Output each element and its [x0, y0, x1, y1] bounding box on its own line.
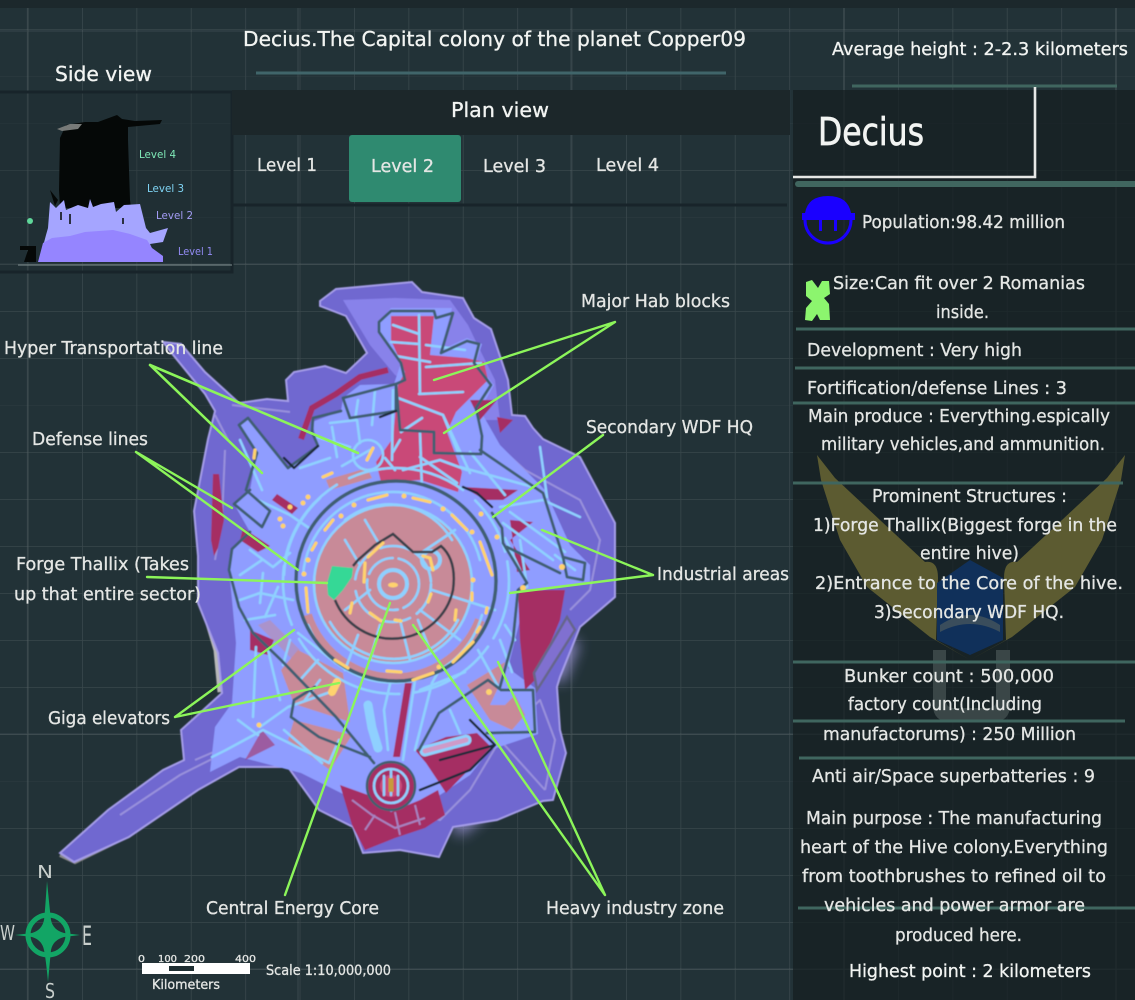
stat: highest point: Highest point : 2 kilometers — [849, 961, 1091, 982]
map: inner fortification wall — [335, 534, 454, 639]
scale bar: 0 — [138, 954, 145, 965]
label: hyper transportation line: Hyper Transportation line — [4, 338, 223, 359]
label: giga elevators: Giga elevators — [48, 708, 170, 729]
tab: level 4: Level 4 — [596, 155, 659, 176]
label: major hab blocks: Major Hab blocks — [581, 291, 730, 312]
label: level 4: Level 4 — [139, 148, 176, 161]
label: level 2: Level 2 — [156, 209, 193, 222]
map: plan of Decius level 2 — [60, 282, 615, 862]
heading: Decius box — [793, 87, 1035, 177]
stat: bunker and factory counts: factory count(Including — [848, 694, 1042, 715]
scale bar: 200 — [184, 954, 205, 965]
map: Forge Thallix sector — [327, 566, 353, 600]
stat: size: inside. — [936, 302, 989, 323]
label: level 3: Level 3 — [147, 182, 184, 195]
label: heavy industry zone: Heavy industry zone — [546, 898, 724, 919]
stat: main purpose: produced here. — [895, 925, 1022, 946]
map: south-east pod — [534, 617, 575, 690]
icon: compass rose: E — [82, 921, 92, 952]
map: central ring district — [296, 481, 496, 681]
label: secondary WDF HQ: Secondary WDF HQ — [586, 417, 753, 438]
stat: main produce — [808, 406, 1110, 455]
map: salmon residential zones — [258, 468, 525, 770]
title: Decius.The Capital colony of the planet Copper09 — [243, 27, 746, 51]
label: central energy core: Central Energy Core — [206, 898, 379, 919]
panel: right information column — [793, 86, 1135, 1000]
stat: size — [833, 273, 1085, 323]
map: outer purple district — [60, 282, 615, 862]
stat: prominent structures: 3)Secondary WDF HQ. — [874, 602, 1064, 623]
stat: main purpose: from toothbrushes to refined oil to — [802, 866, 1106, 887]
average height note: Average height : 2-2.3 kilometers — [832, 39, 1128, 60]
stat: main purpose: vehicles and power armor are — [824, 895, 1085, 916]
icon: compass rose: N — [37, 862, 53, 883]
panel: side view — [0, 62, 232, 272]
scale bar: 100 — [158, 954, 177, 965]
label: forge thallix — [14, 554, 201, 605]
stat: main produce: Main produce : Everything.espically — [808, 406, 1110, 427]
heading: plan view: Plan view — [451, 98, 549, 122]
map: crimson arc north-west — [301, 370, 388, 439]
map: ring districts around the core — [283, 468, 509, 694]
map: outer road network — [385, 315, 481, 490]
tab: level 2 active — [349, 135, 461, 202]
map: south gate hub — [367, 762, 415, 810]
stat: size: Size:Can fit over 2 Romanias — [833, 273, 1085, 294]
stat: main produce: military vehicles,and ammunition. — [821, 434, 1105, 455]
icon: population helmet — [802, 196, 855, 243]
icon: level 4 black tower — [20, 115, 162, 262]
map: hab block crimson zone — [376, 316, 488, 492]
stat: prominent structures: 1)Forge Thallix(Biggest forge in the — [813, 515, 1117, 536]
tab: level 2 active: Level 2 — [371, 156, 434, 177]
label: forge thallix: Forge Thallix (Takes — [16, 554, 189, 575]
stat: main purpose — [800, 808, 1108, 946]
map: defense line walls — [379, 311, 491, 454]
map: yellow transit stops — [254, 448, 565, 728]
stat: main purpose: Main purpose : The manufacturing — [806, 808, 1102, 829]
map: dark crimson industrial zones — [240, 400, 565, 850]
heading: side view: Side view — [55, 62, 152, 86]
map: west crimson strip — [211, 474, 224, 556]
icon: W.D.F. emblem watermark — [817, 455, 1125, 722]
stat: main purpose: heart of the Hive colony.Everything — [800, 837, 1108, 858]
tab: level 3: Level 3 — [483, 156, 546, 177]
map: north wash around the hab lobe — [343, 298, 500, 420]
panel: plan view tabs — [232, 90, 790, 205]
tab: level 1: Level 1 — [257, 155, 317, 176]
stat: bunker and factory counts: Bunker count : 500,000 — [844, 666, 1054, 687]
label: defense lines: Defense lines — [32, 429, 148, 450]
stat: bunker and factory counts — [793, 666, 1125, 745]
icon: level 1 violet base — [38, 230, 163, 262]
icon: compass rose — [0, 862, 92, 1000]
icon: level 3 lavender blocks — [42, 199, 168, 262]
stat: fortification lines: Fortification/defense Lines : 3 — [807, 378, 1067, 399]
scale text: Scale 1:10,000,000 — [266, 963, 391, 979]
label: forge thallix: up that entire sector) — [14, 584, 201, 605]
icon: compass rose: W — [0, 921, 15, 945]
leader lines — [136, 322, 653, 895]
label: industrial areas: Industrial areas — [657, 564, 789, 585]
scale bar: 400 — [235, 954, 256, 965]
stat: population: Population:98.42 million — [862, 212, 1065, 233]
stat: bunker and factory counts: manufactorums) : 250 Million — [823, 724, 1076, 745]
map: faint outer roads — [120, 405, 600, 820]
stat: superbatteries: Anti air/Space superbatteries : 9 — [812, 766, 1095, 787]
stat: prominent structures: Prominent Structures : — [872, 486, 1067, 507]
stat: prominent structures: 2)Entrance to the Core of the hive. — [815, 573, 1123, 594]
stat: development: Development : Very high — [807, 340, 1022, 361]
map: main periwinkle city body — [210, 308, 590, 822]
scale bar — [138, 954, 256, 993]
scale bar: Kilometers — [152, 978, 220, 993]
label: level 1: Level 1 — [178, 245, 213, 258]
map glow edges — [455, 640, 572, 830]
stat: prominent structures: entire hive) — [920, 543, 1019, 564]
heading: Decius box: Decius — [818, 110, 924, 154]
icon: size map — [805, 280, 830, 321]
stat: prominent structures — [813, 486, 1123, 623]
